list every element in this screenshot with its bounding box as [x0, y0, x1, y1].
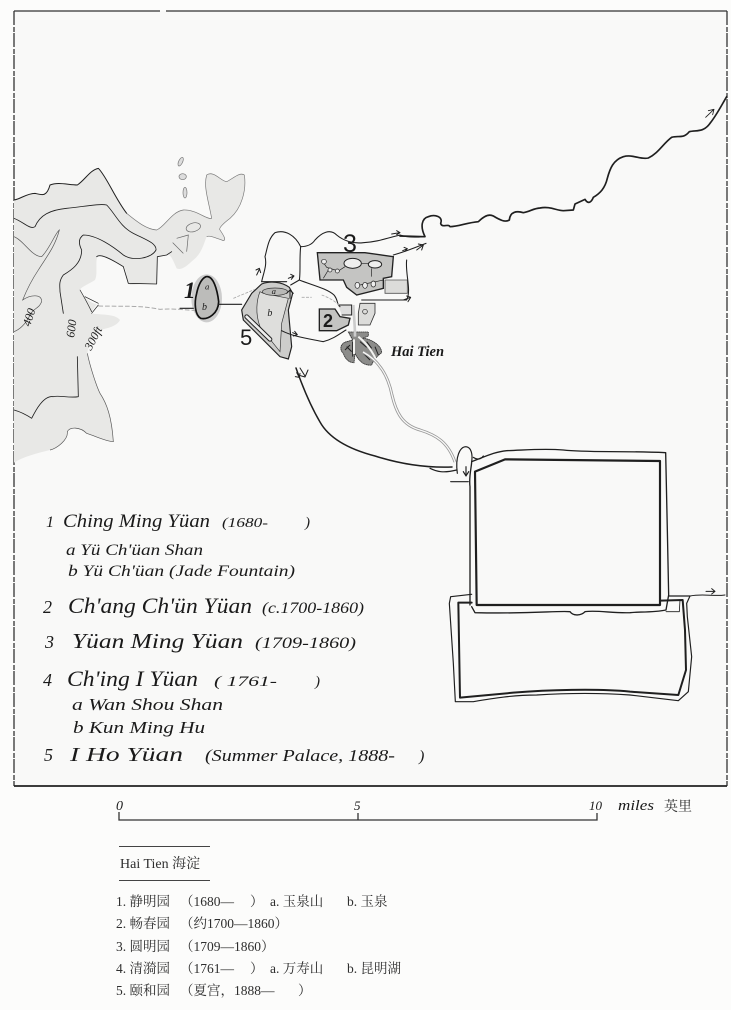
river from Summer Palace to city — [296, 352, 455, 467]
legend: English handwritten: b Kun Ming Hu — [73, 718, 205, 737]
legend: English handwritten: ) — [304, 515, 310, 531]
legend: English handwritten: I Ho Yüan — [69, 744, 183, 766]
legend: Chinese: a. 玉泉山 — [270, 894, 323, 909]
map numbers: 1 — [184, 278, 196, 303]
legend: English handwritten: ( 1761- — [214, 674, 277, 690]
legend: Chinese: ） — [250, 894, 264, 909]
legend: Chinese: （1761— — [180, 961, 234, 976]
garden 4 and 2 — [319, 303, 375, 331]
legend: English handwritten: Yüan Ming Yüan — [72, 629, 243, 653]
legend: English handwritten — [43, 511, 424, 766]
place label: Hai Tien: Hai Tien — [390, 344, 444, 360]
Hai Tien town — [341, 305, 382, 370]
legend: Chinese: 1. 静明园 — [116, 894, 170, 909]
garden 1: Ching Ming Yuan: a — [205, 281, 209, 291]
inner city — [470, 449, 669, 615]
heading: Hai Tien — [119, 846, 210, 880]
legend: English handwritten: 1 — [46, 514, 54, 531]
legend: Chinese: ） — [250, 961, 264, 976]
legend: English handwritten: (1680- — [222, 516, 268, 531]
legend: English handwritten: ) — [314, 674, 320, 690]
hills: contour relief — [14, 157, 245, 463]
legend: Chinese: 4. 清漪园 — [116, 961, 170, 976]
legend: Chinese: 2. 畅春园 — [116, 915, 170, 931]
legend: Chinese: a. 万寿山 — [270, 961, 323, 976]
legend: English handwritten: 4 — [43, 670, 52, 690]
legend: Chinese: （夏宫，1888— — [180, 983, 275, 999]
contour labels — [20, 306, 106, 353]
legend: English handwritten: Ch'ang Ch'ün Yüan — [68, 593, 252, 618]
map numbers: 2 — [323, 311, 333, 331]
scale bar: 5 — [354, 798, 361, 813]
legend: English handwritten: ) — [418, 748, 424, 765]
water gate at north-west corner — [430, 447, 483, 482]
legend: English handwritten: 2 — [43, 597, 52, 617]
garden 3: Yuan Ming Yuan — [317, 253, 407, 295]
legend: English handwritten: (1709-1860) — [255, 635, 356, 652]
legend: English handwritten: Ching Ming Yüan — [63, 511, 210, 532]
map numbers: 3 — [343, 230, 357, 258]
legend: English handwritten: 5 — [44, 745, 53, 765]
contour labels: 300ft — [81, 323, 106, 353]
legend: English handwritten: a Wan Shou Shan — [72, 695, 223, 714]
scale bar: 10 — [589, 798, 602, 813]
heading: Hai Tien: Hai Tien 海淀 — [120, 856, 200, 872]
garden 1: Ching Ming Yuan — [191, 274, 222, 322]
contour labels: 400 — [20, 306, 38, 328]
garden 5: Summer Palace: b — [267, 308, 272, 319]
legend: English handwritten: b Yü Ch'üan (Jade Fountain) — [68, 563, 295, 580]
legend: English handwritten: (c.1700-1860) — [262, 600, 364, 617]
legend: Chinese: （1709—1860） — [180, 939, 274, 954]
legend: Chinese: （约1700—1860） — [180, 916, 288, 931]
scale bar — [116, 798, 692, 820]
scale bar: 0 — [116, 799, 123, 814]
outflow arrow — [690, 589, 725, 596]
legend: Chinese: b. 玉泉 — [347, 894, 388, 909]
legend: English handwritten: Ch'ing I Yüan — [67, 666, 198, 691]
legend: Chinese: （1680— — [180, 894, 234, 909]
legend: Chinese — [116, 894, 401, 999]
contour labels: 600 — [63, 319, 79, 338]
legend: English handwritten: 3 — [44, 632, 54, 652]
panel: map sheet — [14, 11, 727, 786]
flow arrows — [256, 231, 423, 377]
legend: Chinese: 3. 圆明园 — [116, 939, 170, 954]
outer city — [449, 594, 692, 702]
garden 5: Summer Palace: a — [272, 286, 276, 296]
legend: Chinese: ） — [298, 983, 312, 998]
legend: English handwritten: a Yü Ch'üan Shan — [66, 542, 203, 559]
scale bar: 英里 — [664, 799, 692, 815]
Peking city walls and moat — [430, 447, 725, 702]
gardens cluster — [180, 231, 426, 377]
river to the north-east — [400, 97, 727, 237]
legend: English handwritten: (Summer Palace, 1888- — [205, 746, 395, 765]
scale bar: miles — [618, 798, 654, 814]
canals — [180, 232, 426, 342]
map numbers: 5 — [240, 325, 252, 350]
legend: Chinese: b. 昆明湖 — [347, 961, 401, 976]
legend: Chinese: 5. 颐和园 — [116, 983, 170, 998]
map numbers — [184, 230, 357, 350]
garden 5: Summer Palace — [242, 282, 293, 359]
garden 1: Ching Ming Yuan: b — [202, 302, 207, 313]
